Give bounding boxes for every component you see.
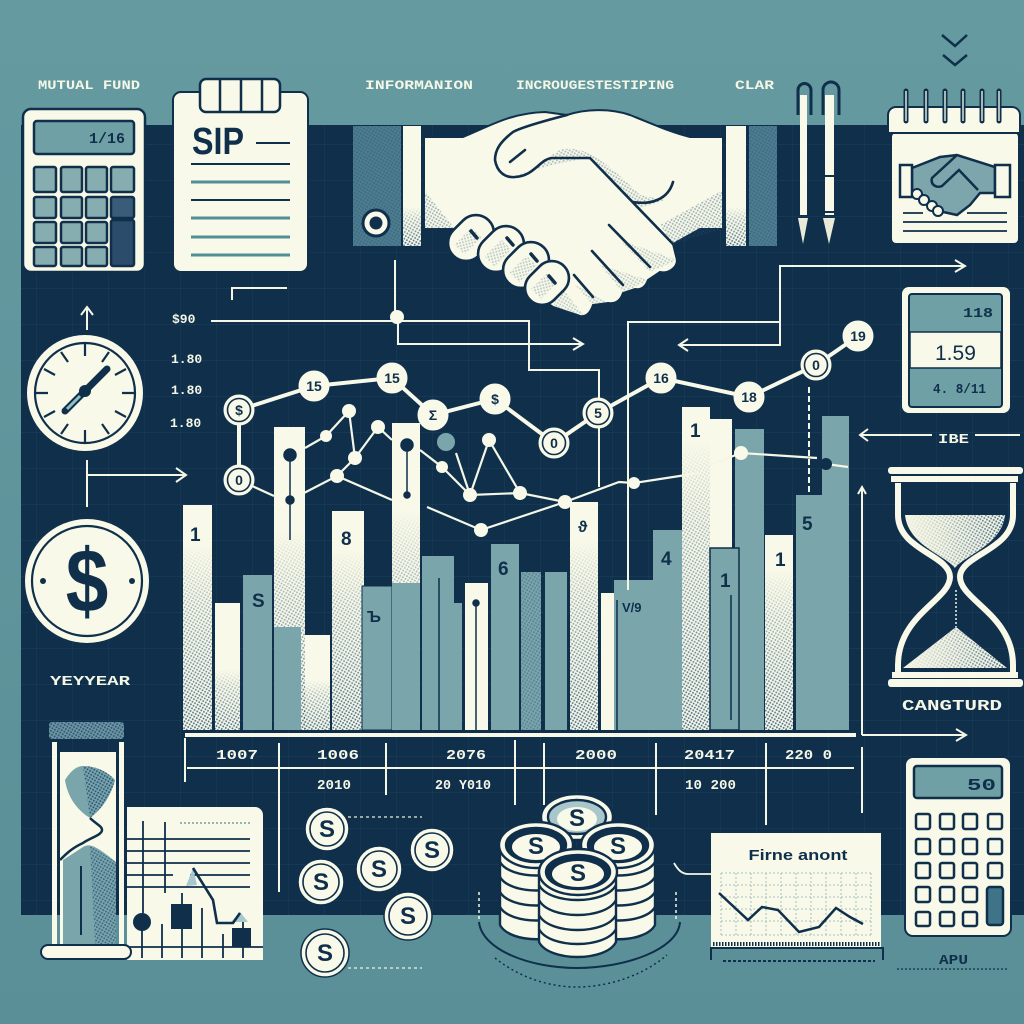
line chart: main line with markers: 16 — [653, 370, 669, 386]
back coin: S — [569, 805, 585, 832]
y axis labels: 1.80 — [170, 416, 201, 431]
line chart: secondary lines — [239, 404, 848, 537]
x axis with year labels: 10 200 — [685, 778, 736, 794]
header labels: INFORMANION — [365, 78, 473, 93]
arrow: card connector — [674, 863, 711, 874]
line chart: main line with markers: 15 — [306, 378, 322, 394]
hourglass base — [41, 945, 131, 959]
panel: line chart card: Firne anont — [748, 847, 848, 864]
bar chart: 1 — [690, 421, 701, 442]
x axis with year labels: 2010 — [317, 778, 351, 794]
label: APU: APU — [939, 953, 968, 969]
icon: calculator display right: 118 — [963, 306, 993, 322]
bar chart: 1 — [775, 550, 786, 571]
icon: dollar coin: $ — [66, 530, 108, 631]
bar chart: 4 — [661, 549, 672, 570]
icon: calculator display right — [902, 287, 1010, 413]
bar chart: Ъ — [367, 609, 381, 626]
y axis labels: 1.80 — [171, 352, 202, 367]
icon: calculator top left — [23, 109, 145, 272]
flow connector arrows — [81, 260, 1020, 741]
icon: hourglass bottom left — [49, 722, 124, 946]
icon: SIP clipboard document: SIP — [192, 121, 244, 163]
x axis with year labels: 1006 — [317, 748, 359, 764]
icon: pens — [798, 82, 839, 244]
icon: calculator display right: 1.59 — [935, 342, 976, 365]
y axis labels: 1.80 — [171, 383, 202, 398]
y axis labels — [170, 312, 202, 431]
icons: scattered dollar coins: S — [313, 869, 329, 896]
label: APU — [897, 953, 1008, 969]
line chart: main line with markers: 18 — [741, 389, 757, 405]
bar chart: ϑ — [578, 519, 588, 536]
icon: calendar with handshake — [888, 91, 1020, 243]
front stack: S — [570, 860, 586, 887]
front stack — [539, 849, 617, 957]
panel: line chart card — [711, 833, 883, 961]
line chart: main line with markers: 0 — [235, 472, 243, 488]
line chart: main line with markers — [224, 321, 873, 495]
header labels: CLAR — [735, 78, 774, 93]
icon: stopwatch clock — [27, 335, 143, 451]
panel: mini candle chart — [127, 807, 263, 960]
icon: calculator top left: 1/16 — [89, 131, 125, 148]
x axis with year labels: 20417 — [684, 748, 735, 764]
icon: hourglass — [888, 467, 1023, 687]
line chart: main line with markers: Σ — [429, 407, 437, 423]
x axis with year labels: 1007 — [216, 748, 258, 764]
label: cangturd: CANGTURD — [902, 698, 1002, 715]
fingers — [441, 208, 576, 312]
label: IBE: IBE — [938, 432, 969, 448]
icon: down chevrons — [942, 35, 967, 65]
icon: coin stacks — [479, 794, 680, 987]
left stack: S — [528, 833, 544, 860]
line chart: main line with markers: $ — [491, 391, 499, 407]
left stack — [499, 822, 573, 939]
dark chart panel — [21, 125, 1024, 915]
icons: scattered dollar coins: S — [317, 940, 333, 967]
hands — [424, 110, 723, 316]
line chart: main line with markers: $ — [235, 402, 243, 418]
header labels — [38, 78, 774, 93]
bar chart — [183, 407, 849, 730]
icon: SIP clipboard document — [173, 79, 308, 272]
x axis with year labels: 2076 — [446, 748, 486, 764]
bar chart: 1 — [720, 571, 731, 592]
icons: scattered dollar coins: S — [424, 837, 440, 864]
bar chart: 1 — [190, 525, 201, 546]
icons: scattered dollar coins: S — [400, 903, 416, 930]
icons: scattered dollar coins — [298, 807, 454, 977]
illustration: handshake — [353, 110, 777, 317]
header labels: INCROUGESTESTIPING — [516, 78, 674, 93]
right stack: S — [610, 833, 626, 860]
y axis labels: $90 — [172, 312, 196, 327]
line chart: main line with markers: 15 — [384, 370, 400, 386]
back coin — [541, 794, 613, 840]
bar chart: 8 — [341, 529, 352, 550]
bar chart: 5 — [802, 514, 813, 535]
x axis with year labels: 2000 — [575, 748, 617, 764]
left cuff — [353, 126, 421, 246]
vertical stems on bars — [284, 439, 731, 730]
icons: scattered dollar coins: S — [371, 856, 387, 883]
bar chart: S — [252, 591, 265, 612]
right stack — [581, 822, 655, 939]
icon: calculator display right: 4. 8/11 — [933, 382, 986, 398]
icon: calculator bottom right — [905, 757, 1011, 936]
icon: dollar coin — [25, 519, 149, 643]
bar chart: V/9 — [622, 600, 642, 615]
icon: calculator bottom right: 50 — [967, 777, 996, 796]
line chart: main line with markers: 0 — [812, 357, 820, 373]
header labels: MUTUAL FUND — [38, 78, 140, 93]
line chart: main line with markers: 0 — [550, 435, 558, 451]
bar chart: 6 — [498, 559, 509, 580]
label: year: YEYYEAR — [50, 674, 131, 690]
line chart: main line with markers: 19 — [850, 328, 866, 344]
icons: scattered dollar coins: S — [319, 816, 335, 843]
line chart: main line with markers: 5 — [594, 405, 602, 421]
x axis with year labels: 20 Y010 — [435, 778, 491, 794]
x axis with year labels — [185, 735, 862, 892]
right cuff — [726, 126, 777, 246]
x axis with year labels: 220 0 — [785, 748, 832, 764]
